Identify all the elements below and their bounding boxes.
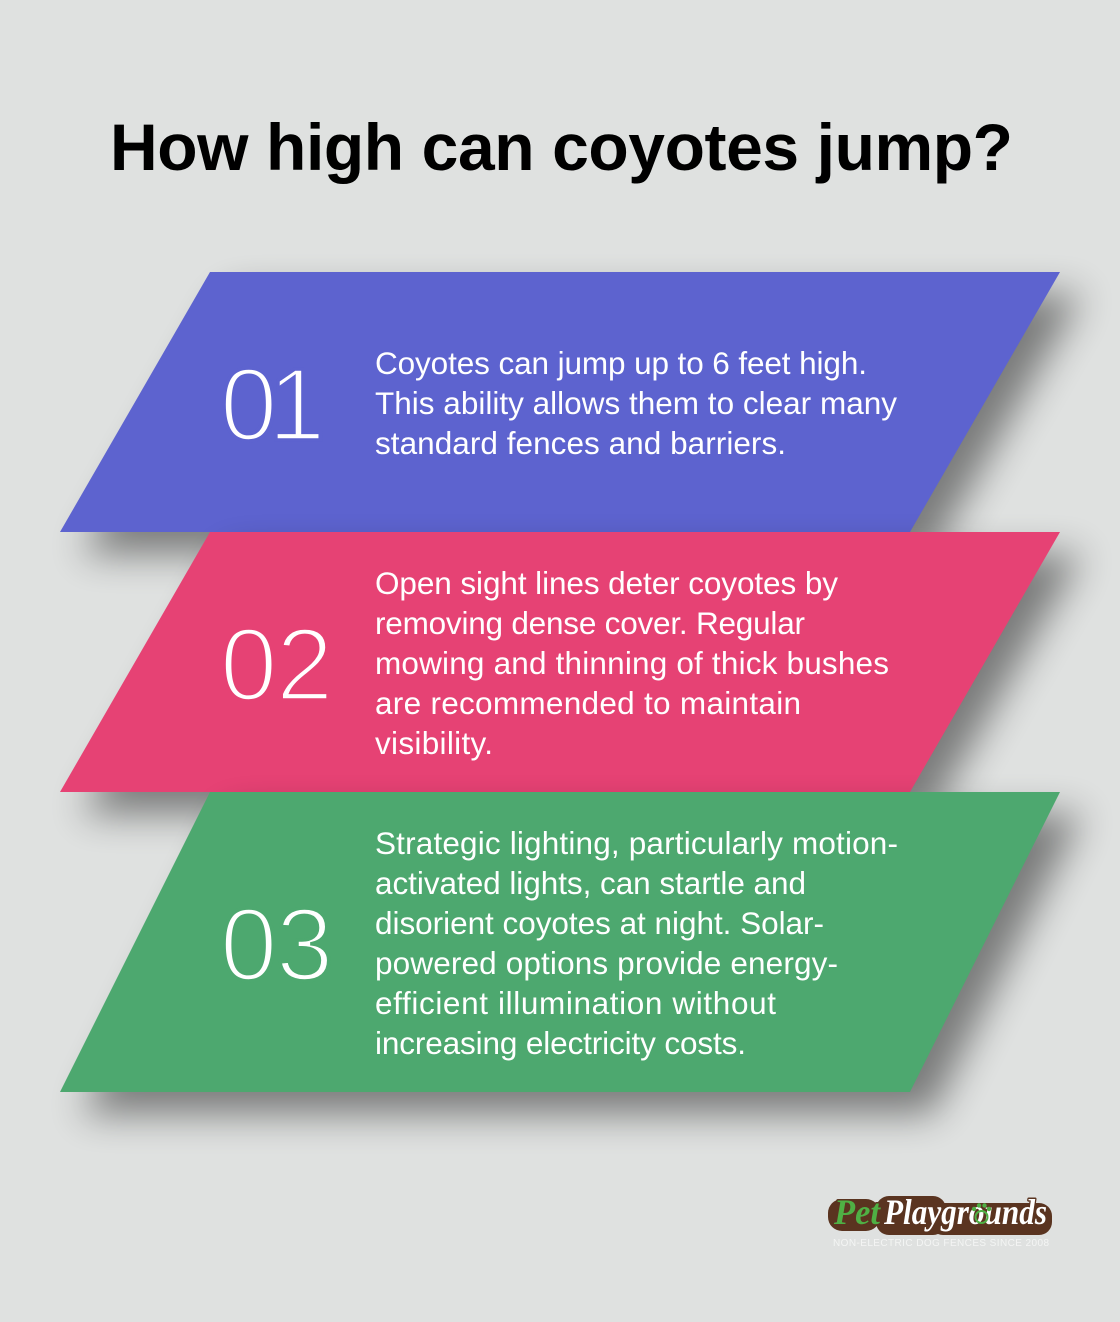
text: step 03: Strategic lighting, particularly motion- <box>375 825 898 861</box>
logo: Pet Playgrounds: Playgrounds <box>883 1192 1047 1232</box>
number 03: 03 <box>220 887 333 1002</box>
text: step 03: increasing electricity costs. <box>375 1025 746 1061</box>
title: How high can coyotes jump? <box>110 110 1013 184</box>
text: step 02: mowing and thinning of thick bushes <box>375 645 889 681</box>
text: step 01 <box>375 345 897 461</box>
text: step 02 <box>375 565 889 761</box>
text: step 02: visibility. <box>375 725 493 761</box>
logo: Pet Playgrounds: Pet <box>833 1192 881 1232</box>
text: step 03 <box>375 825 898 1061</box>
text: step 03: disorient coyotes at night. Solar- <box>375 905 824 941</box>
panel: step 01 <box>60 272 1082 554</box>
panel: step 02 <box>60 532 1082 814</box>
tagline: NON-ELECTRIC DOG FENCES SINCE 2008 <box>833 1238 1049 1249</box>
text: step 01: This ability allows them to clear many <box>375 385 897 421</box>
text: step 02: Open sight lines deter coyotes by <box>375 565 838 601</box>
icon: paw <box>972 1203 991 1223</box>
text: step 03: activated lights, can startle and <box>375 865 806 901</box>
text: step 01: Coyotes can jump up to 6 feet high. <box>375 345 867 381</box>
text: step 02: are recommended to maintain <box>375 685 801 721</box>
text: step 03: powered options provide energy- <box>375 945 838 981</box>
text: step 02: removing dense cover. Regular <box>375 605 805 641</box>
logo: Pet Playgrounds <box>828 1192 1052 1249</box>
number 02: 02 <box>220 607 333 722</box>
text: step 03: efficient illumination without <box>375 985 776 1021</box>
number 01: 01 <box>220 347 325 462</box>
panel: step 03 <box>60 792 1082 1114</box>
text: step 01: standard fences and barriers. <box>375 425 786 461</box>
